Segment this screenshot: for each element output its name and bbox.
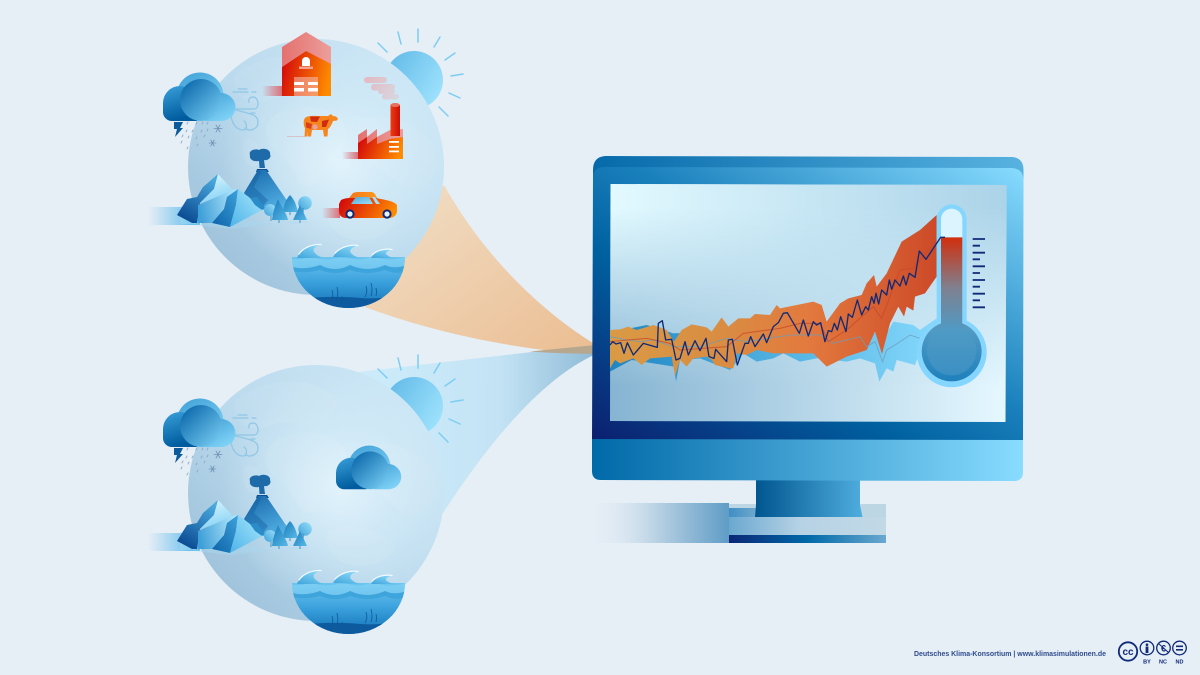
- beam: blue from natural globe to monitor: [350, 345, 596, 516]
- icon: factory: [342, 103, 403, 159]
- licence badges: cc: [1122, 647, 1134, 658]
- line: forced mean: [610, 240, 937, 350]
- icon: mountains and volcano upper: [148, 149, 312, 229]
- icon: smoke: [364, 77, 399, 100]
- line: natural mean: [610, 335, 920, 362]
- chart: temperature simulation bands: [610, 215, 937, 382]
- beam overlap: [530, 345, 596, 354]
- band: all forcing orange: [610, 215, 937, 376]
- monitor stand neck: [755, 480, 862, 517]
- licence badges: [1119, 641, 1186, 666]
- monitor stand base: [729, 504, 886, 543]
- icon: storm cloud upper: [163, 72, 258, 149]
- icon: mountains and volcano lower: [148, 475, 312, 555]
- monitor screen: [610, 184, 1006, 422]
- line: observed temperature: [610, 237, 945, 365]
- licence badges: NC: [1159, 660, 1167, 666]
- icon: sun upper: [378, 29, 463, 116]
- monitor: [587, 156, 1024, 543]
- icon: ocean lower: [285, 570, 410, 646]
- monitor bezel: [592, 167, 1024, 440]
- icon: storm cloud lower: [163, 398, 258, 475]
- globe lower: [188, 365, 444, 621]
- monitor top edge: [593, 156, 1024, 190]
- band: natural forcing blue: [610, 318, 937, 382]
- licence badges: BY: [1143, 660, 1151, 666]
- icon: barn: [262, 32, 331, 96]
- beam: orange from emission globe to monitor: [365, 185, 596, 354]
- icon: cow: [287, 114, 338, 136]
- icon: car: [322, 192, 397, 219]
- monitor lower band: [592, 439, 1023, 481]
- thermometer: [917, 204, 987, 387]
- icon: sun lower: [378, 355, 463, 442]
- licence badges: €: [1161, 644, 1166, 654]
- credit text: Deutsches Klima-Konsortium | www.klimasimulationen.de: [914, 649, 1107, 658]
- thermometer scale: [973, 239, 985, 307]
- icon: ocean upper: [285, 244, 410, 320]
- licence badges: ND: [1176, 660, 1183, 666]
- icon: cloud in lower globe: [336, 446, 401, 489]
- monitor stand base shadow: [587, 503, 729, 543]
- globe upper: [188, 39, 444, 295]
